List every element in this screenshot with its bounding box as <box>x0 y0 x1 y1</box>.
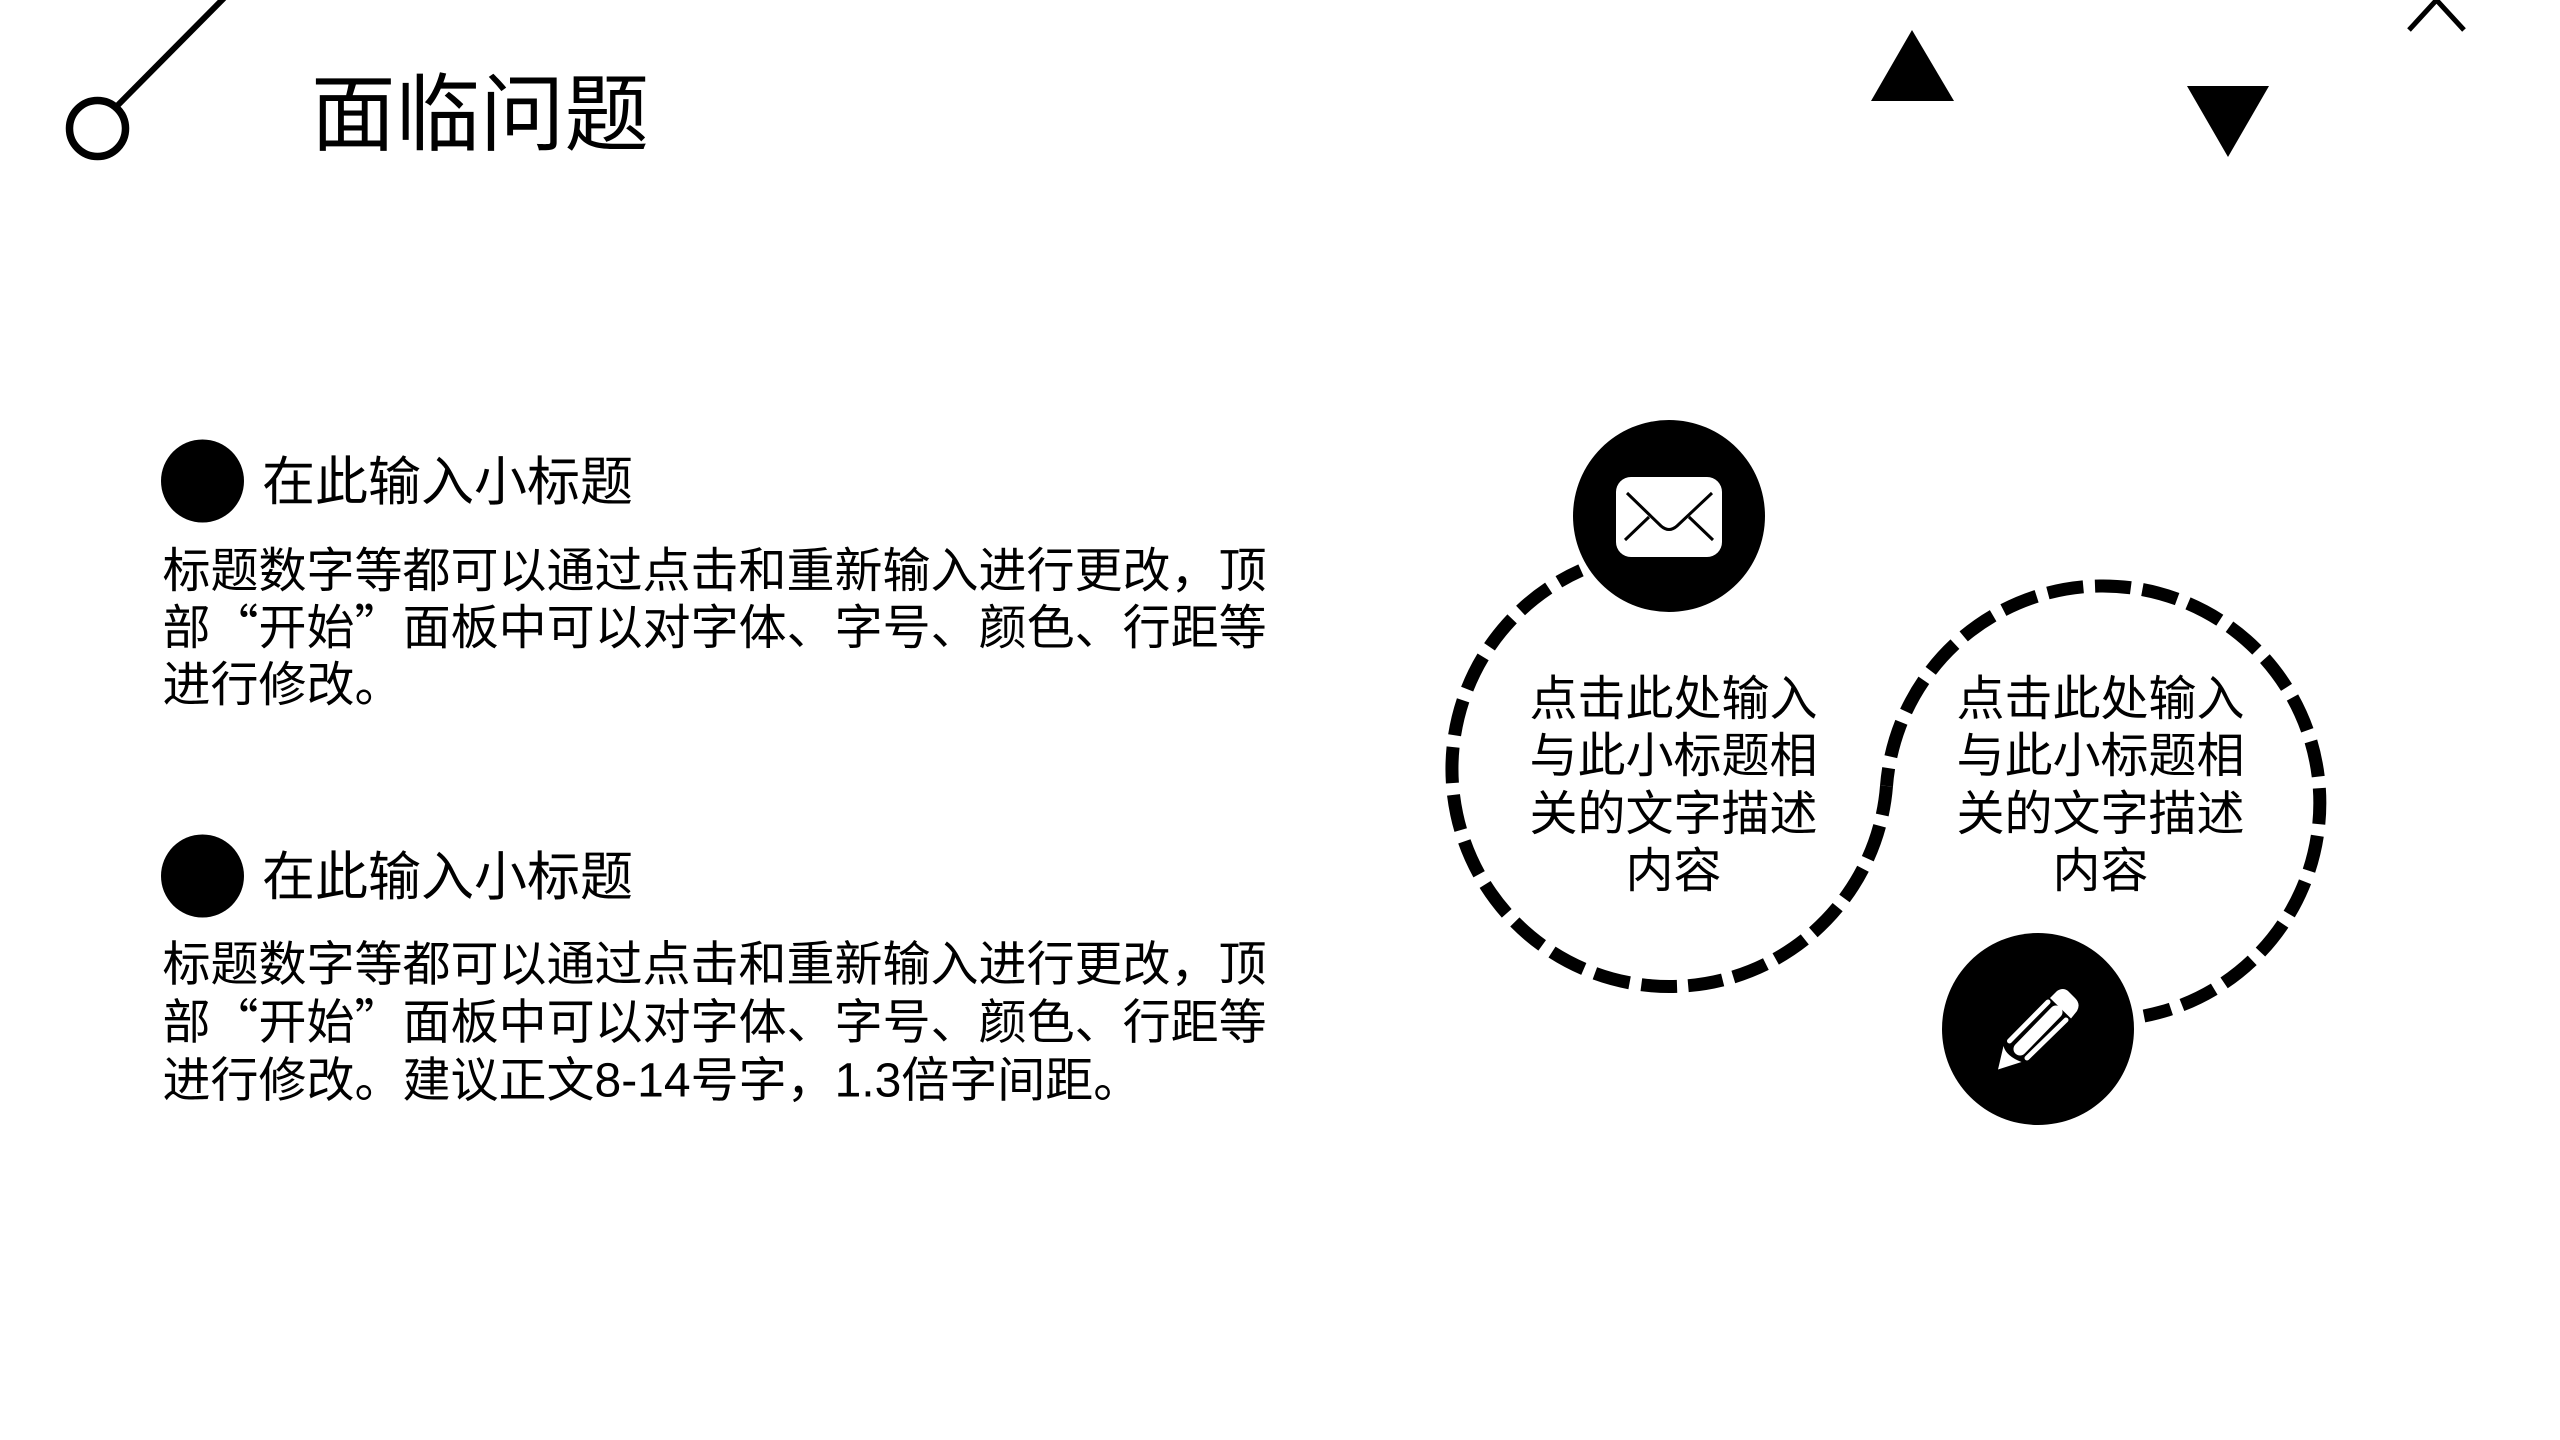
left circle description: 与此小标题相 <box>1529 730 1818 783</box>
right circle description: 点击此处输入 <box>1956 673 2245 726</box>
subheading: 在此输入小标题 <box>262 848 633 907</box>
body text: 部“开始”面板中可以对字体、字号、颜色、行距等 <box>162 982 1267 1052</box>
body text: 进行修改。建议正文8-14号字，1.3倍字间距。 <box>162 1054 1141 1108</box>
left circle description: 关的文字描述 <box>1529 788 1818 841</box>
bullet <box>161 834 244 918</box>
panel: first text block <box>161 440 1267 712</box>
decoration: chevron <box>2409 0 2464 30</box>
right circle description <box>1956 673 2245 898</box>
right circle description: 关的文字描述 <box>1956 788 2245 841</box>
left circle description: 点击此处输入 <box>1529 673 1818 726</box>
icon: pencil badge <box>1942 933 2134 1125</box>
body text <box>162 938 1267 1108</box>
subheading: 在此输入小标题 <box>262 453 633 512</box>
body text: 标题数字等都可以通过点击和重新输入进行更改，顶 <box>162 938 1267 992</box>
body text: 部“开始”面板中可以对字体、字号、颜色、行距等 <box>162 588 1267 658</box>
title: 面临问题 <box>311 68 649 162</box>
body text <box>162 545 1267 712</box>
panel: second text block <box>161 834 1267 1108</box>
decoration: downward triangle <box>2187 86 2269 157</box>
left circle description <box>1529 673 1818 898</box>
dashed S-curve connector <box>1452 570 2320 1016</box>
body text: 标题数字等都可以通过点击和重新输入进行更改，顶 <box>162 545 1267 598</box>
left circle description: 内容 <box>1625 845 1722 898</box>
bullet <box>161 440 244 522</box>
decoration: upward triangle <box>1871 30 1954 101</box>
icon: ring with diagonal line <box>70 0 224 156</box>
right circle description: 与此小标题相 <box>1956 730 2245 783</box>
icon: envelope badge <box>1573 420 1765 612</box>
body text: 进行修改。 <box>162 659 403 712</box>
right circle description: 内容 <box>2052 845 2149 898</box>
